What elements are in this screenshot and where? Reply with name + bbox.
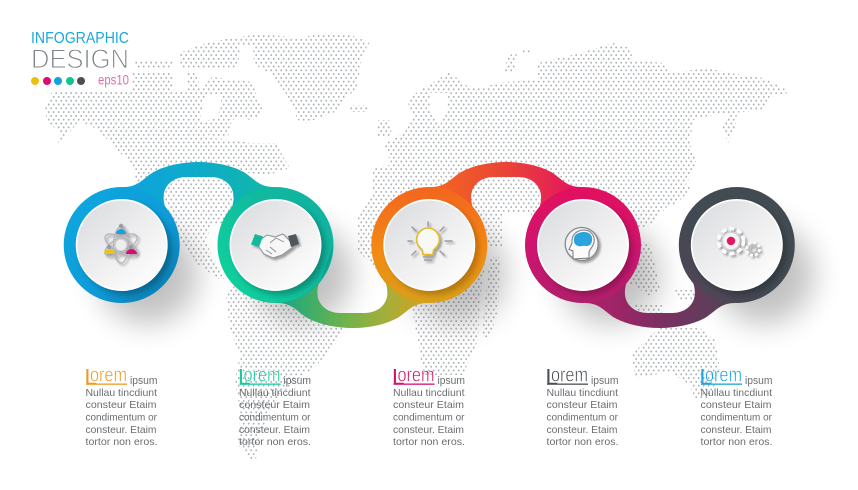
map: Asia <box>470 43 792 247</box>
map: Kamchatka and Japan <box>667 113 737 207</box>
title block <box>31 30 129 88</box>
label: lorem dark grey <box>546 364 588 390</box>
text block 1: condimentum or <box>86 412 157 424</box>
map: Madagascar <box>483 257 500 337</box>
map: South America <box>226 285 345 460</box>
circle 4: magenta <box>525 187 641 303</box>
text block 2: ipsum <box>284 375 311 387</box>
icon: atom with people <box>102 224 140 263</box>
label: lorem orange <box>84 364 127 390</box>
label: lorem dark grey: orem <box>551 364 588 386</box>
label: lorem orange: orem <box>90 364 127 386</box>
map: North and Central America <box>45 73 290 279</box>
text block 4: Nullau tincdiunt <box>546 387 618 399</box>
text block 3: Nullau tincdiunt <box>393 387 465 399</box>
icon: light bulb <box>408 222 452 260</box>
text block 1: Nullau tincdiunt <box>86 387 157 399</box>
circle 3: orange <box>371 187 487 303</box>
text block 4: consteur. Etaim <box>546 424 618 436</box>
text block 1: ipsum <box>130 375 158 387</box>
label: lorem blue <box>700 364 742 390</box>
text block 5: consteur. Etaim <box>700 424 772 436</box>
circle 1: blue <box>64 187 180 303</box>
text block 4 <box>546 364 618 448</box>
connector: green to orange, bottom arch <box>277 258 427 328</box>
text block 3: tortor non eros. <box>393 436 465 448</box>
text block 2: Nullau tincdiunt <box>239 387 311 399</box>
text block 2: condimentum or <box>239 412 311 424</box>
text block 4: ipsum <box>591 375 618 387</box>
circle 5: dark grey <box>679 187 795 303</box>
text block 1: consteur Etaim <box>86 399 157 411</box>
heading: infographic: INFOGRAPHIC <box>31 30 129 47</box>
circle 2: teal <box>218 187 334 303</box>
text block 3: consteur. Etaim <box>393 424 464 436</box>
soft shadows below the circles <box>98 224 814 324</box>
label: lorem orange: L <box>84 364 97 390</box>
label: lorem magenta: L <box>392 364 405 390</box>
icon: head with brain <box>565 228 598 260</box>
text block 2: consteur. Etaim <box>239 424 310 436</box>
map: arctic islands and Greenland <box>135 33 370 123</box>
label: lorem green: orem <box>244 364 280 386</box>
map: Arctic Russia islands <box>503 50 533 72</box>
text block 2 <box>238 364 311 448</box>
text block 5: consteur Etaim <box>700 399 772 411</box>
label: lorem green: L <box>238 364 251 390</box>
text block 1 <box>84 364 158 448</box>
text block 5: Nullau tincdiunt <box>700 387 772 399</box>
text block 5: tortor non eros. <box>700 436 772 448</box>
text block 4: tortor non eros. <box>546 436 618 448</box>
label: lorem blue: L <box>700 364 712 390</box>
text block 1: tortor non eros. <box>86 436 158 448</box>
text block 3 <box>392 364 465 448</box>
heading: design: DESIGN <box>31 44 129 74</box>
text block 4: condimentum or <box>546 412 618 424</box>
text block 3: ipsum <box>438 375 465 387</box>
version label: eps10 <box>98 72 129 88</box>
text block 2: consteur Etaim <box>239 399 310 411</box>
label: lorem dark grey: L <box>546 364 558 390</box>
icon: gears <box>718 228 760 256</box>
text block 2: tortor non eros. <box>239 436 311 448</box>
text block 5 <box>700 364 772 448</box>
label: lorem magenta: orem <box>398 364 434 386</box>
text block 3: consteur Etaim <box>393 399 464 411</box>
text block 4: consteur Etaim <box>546 399 618 411</box>
text block 3: condimentum or <box>393 412 465 424</box>
label: lorem green <box>238 364 280 390</box>
text block 1: consteur. Etaim <box>86 424 157 436</box>
label: lorem magenta <box>392 364 434 390</box>
map: Europe and Africa <box>358 72 487 375</box>
map: Australia <box>632 328 720 400</box>
dotted world map <box>45 33 792 460</box>
icon: handshake <box>251 234 299 258</box>
text block 5: condimentum or <box>700 412 772 424</box>
map: South East Asia <box>627 242 697 315</box>
colour dots <box>31 77 85 85</box>
text block 5: ipsum <box>745 375 772 387</box>
label: lorem blue: orem <box>705 364 742 386</box>
connector: magenta to grey, bottom arch <box>585 258 735 328</box>
connector: orange to magenta, top arch <box>431 162 581 232</box>
connector: blue to green, top arch <box>124 162 274 232</box>
